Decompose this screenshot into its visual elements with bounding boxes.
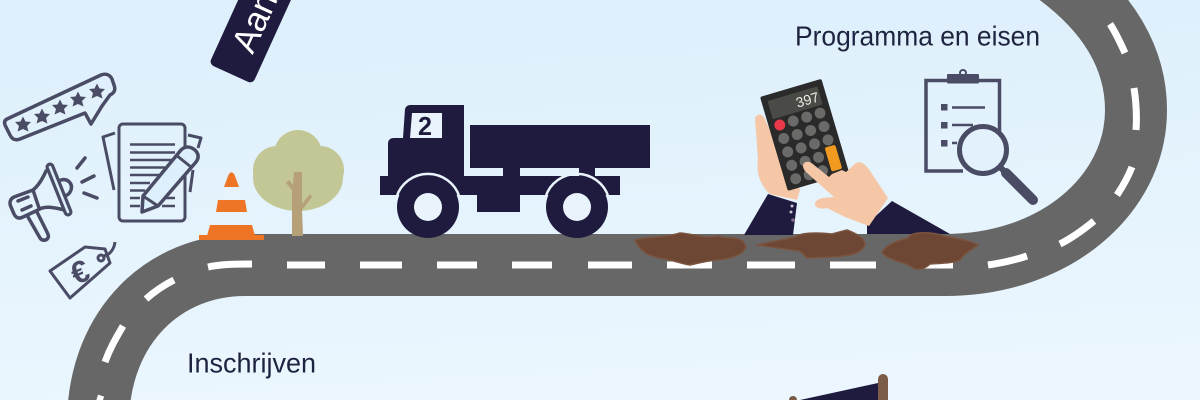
icon: document with pencil — [103, 124, 201, 221]
icon: flag at bottom — [789, 374, 888, 400]
icon: hands with calculator — [744, 79, 950, 235]
label: Aan — [209, 0, 298, 84]
mud patches — [635, 230, 978, 269]
heading: Programma en eisen: Programma en eisen — [795, 20, 1040, 52]
icon: clipboard with magnifier — [926, 70, 1033, 200]
icon: rating bubble — [5, 74, 115, 140]
icon: price tag: € — [65, 253, 94, 291]
icon: price tag — [50, 242, 115, 298]
icon: truck: 2 — [418, 111, 432, 141]
icon: megaphone — [10, 158, 97, 240]
icon: truck — [380, 105, 650, 238]
calculator — [760, 79, 849, 191]
heading: Inschrijven: Inschrijven — [187, 348, 316, 378]
icon: tree — [253, 130, 344, 236]
calculator: 397 — [794, 89, 821, 111]
icon: traffic cone — [199, 172, 264, 240]
